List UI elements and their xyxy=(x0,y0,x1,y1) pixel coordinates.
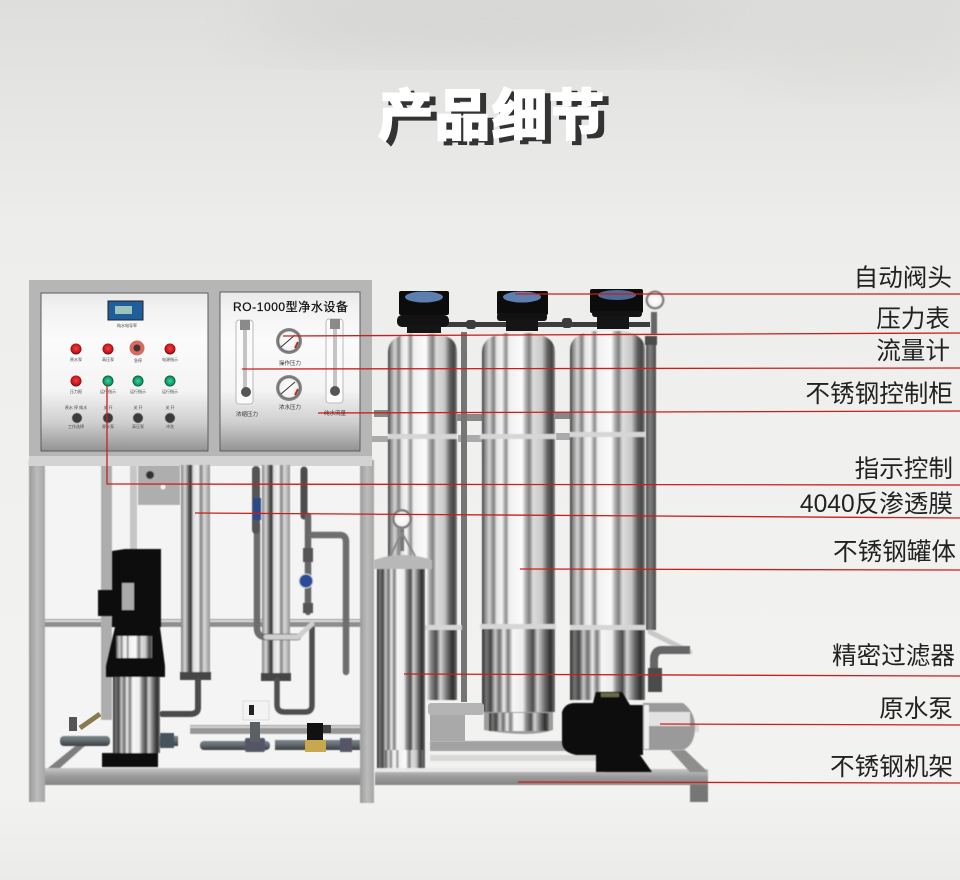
connecting pipe xyxy=(440,318,650,329)
light captions: 关 开 xyxy=(103,404,113,410)
pump body xyxy=(113,677,160,753)
icon: small valve xyxy=(69,714,100,731)
light captions: 关 开 xyxy=(133,404,143,410)
flow meter right xyxy=(326,319,343,403)
pump motor xyxy=(112,549,161,627)
tank 2 xyxy=(480,333,556,734)
component labels: 自动阀头 xyxy=(854,264,952,292)
gauge captions: 操作压力 xyxy=(279,359,301,367)
leader: 4040反渗透膜 xyxy=(195,513,960,518)
leader: 不锈钢机架 xyxy=(518,782,960,783)
valve block at tank 1 xyxy=(428,703,484,741)
component labels: 原水泵 xyxy=(879,695,953,723)
flow meter left xyxy=(236,320,253,404)
leader: 流量计 xyxy=(242,368,960,369)
light captions: 原水 停 纯水 xyxy=(65,404,87,410)
display caption: 纯水电导率 xyxy=(117,322,137,328)
leader: 压力表 xyxy=(283,333,960,336)
right skid frame xyxy=(375,741,708,802)
component labels: 精密过滤器 xyxy=(832,642,955,670)
light captions: 运行指示 xyxy=(100,388,116,394)
membrane vessels xyxy=(162,465,346,714)
component labels xyxy=(800,264,956,781)
motor plate xyxy=(601,693,619,697)
control cabinet xyxy=(29,280,372,466)
valve head 1 xyxy=(397,291,449,333)
rotary switches xyxy=(72,413,175,423)
pump base xyxy=(102,753,158,767)
right side pressure gauge and riser pipe xyxy=(645,290,690,692)
pressure gauge bottom xyxy=(276,375,302,401)
component labels: 不锈钢控制柜 xyxy=(805,380,953,408)
indicator lights xyxy=(70,340,176,386)
component labels: 不锈钢机架 xyxy=(830,753,953,781)
vertical multistage pump xyxy=(98,549,165,767)
pressure gauge top xyxy=(276,328,302,354)
leader: 不锈钢罐体 xyxy=(520,569,960,570)
gauge captions: 浓缩压力 xyxy=(236,410,258,418)
gauge captions: 纯水流量 xyxy=(324,409,346,417)
light captions: 运行指示 xyxy=(130,388,146,394)
light captions: 高压泵 xyxy=(102,356,114,362)
automatic control valves xyxy=(397,289,650,333)
leader: 自动阀头 xyxy=(515,293,960,295)
leader: 精密过滤器 xyxy=(404,674,960,676)
component labels: 压力表 xyxy=(876,305,950,333)
light captions xyxy=(65,356,178,429)
pump coupling xyxy=(116,636,152,658)
component labels: 流量计 xyxy=(876,337,950,365)
tank 1 xyxy=(388,334,462,700)
RO unit frame xyxy=(29,460,374,803)
horizontal low pipes xyxy=(60,733,360,752)
light captions: 运行指示 xyxy=(162,388,178,394)
leader: 原水泵 xyxy=(660,724,960,725)
light captions: 压力报 xyxy=(70,388,82,394)
light captions: 原水泵 xyxy=(70,356,82,362)
light captions: 原水泵 xyxy=(102,423,114,429)
valve head 3 xyxy=(590,289,643,329)
panel: right gauge panel xyxy=(220,292,360,451)
panel: left control panel xyxy=(41,293,208,451)
valve head 2 xyxy=(497,291,548,331)
horizontal raw water pump xyxy=(562,692,699,772)
tank 3 xyxy=(570,331,645,700)
pipes around membranes xyxy=(162,470,346,714)
pump junction box xyxy=(98,590,113,616)
light captions: 冲洗 xyxy=(166,423,174,429)
red leader lines xyxy=(107,294,960,783)
component labels: 指示控制 xyxy=(855,455,953,483)
motor foot xyxy=(596,755,652,772)
precision filter xyxy=(374,509,432,768)
light captions: 急停 xyxy=(134,357,142,363)
icon: pressure switch xyxy=(243,701,269,742)
light captions: 高压泵 xyxy=(132,423,144,429)
gauge captions: 浓水压力 xyxy=(279,403,301,411)
light captions: 关 开 xyxy=(165,404,175,410)
light captions: 工作选择 xyxy=(68,423,84,429)
light captions: 电源指示 xyxy=(162,356,178,362)
component labels: 4040反渗透膜 xyxy=(800,490,953,518)
panel heading: RO-1000型净水设备 xyxy=(233,300,348,314)
filter gauge xyxy=(392,509,412,529)
title: 产品细节 xyxy=(384,89,612,151)
pump nameplate xyxy=(122,583,134,610)
motor xyxy=(562,692,643,755)
leader: 不锈钢控制柜 xyxy=(318,411,960,413)
pump neck xyxy=(106,627,165,677)
component labels: 不锈钢罐体 xyxy=(833,538,956,566)
leader: 指示控制 xyxy=(107,385,960,485)
gauge captions xyxy=(236,359,346,418)
softener tanks back connections xyxy=(372,332,570,702)
title: 产品细节 xyxy=(378,85,606,147)
icon: solenoid valve xyxy=(305,723,331,752)
icon: digital display xyxy=(108,301,143,320)
pump head xyxy=(643,703,695,750)
